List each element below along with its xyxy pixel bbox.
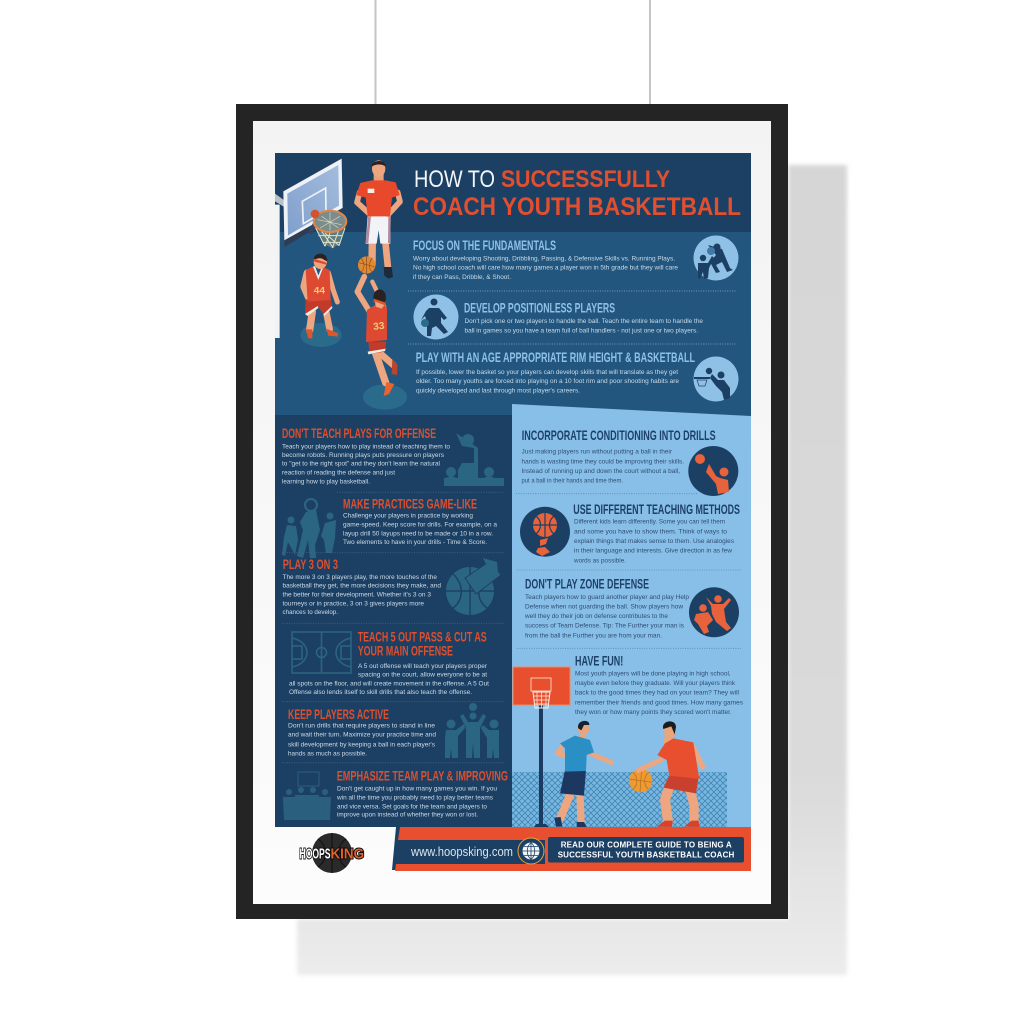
illustration: hoop and backboard (275, 159, 346, 338)
divider (408, 290, 736, 292)
body text: spacing on the court, allow everyone to be at (358, 672, 487, 679)
body text: remember their friends and good times. How many games (575, 699, 743, 706)
illustration: player 44 (300, 254, 342, 347)
icon: basketball and clipboard (446, 558, 501, 615)
divider (337, 491, 505, 493)
body text: game-speed. Keep score for drills. For example, on a (343, 522, 498, 529)
body text: older. Too many youths are forced into playing on a 10 foot rim and poor shooting habits are (416, 378, 680, 385)
section: keep players active (288, 703, 499, 758)
heading: DEVELOP POSITIONLESS PLAYERS (464, 300, 615, 316)
body text (343, 513, 498, 546)
body text: success of Team Defense. Tip: The Further your man is (525, 623, 684, 630)
body text: and vice versa. Set goals for the team and players to (337, 803, 488, 810)
section: have fun (575, 653, 743, 716)
section: play 3 on 3 (282, 556, 501, 616)
body text (464, 318, 704, 334)
icon: basketball trail (520, 507, 570, 557)
body text (288, 723, 437, 758)
logo: hoopsking: KING (330, 846, 364, 862)
body text: they won or how many points they scored won't matter. (575, 709, 732, 716)
illustration: player 33 with ball (357, 256, 407, 410)
body text: Instead of running up and down the court without a ball, (522, 468, 680, 475)
section: use different teaching methods (520, 501, 740, 564)
body text: improve upon instead of whether they won or lost. (337, 812, 478, 819)
body text (282, 443, 450, 486)
dark left panel background (275, 415, 512, 827)
call to action button: SUCCESSFUL YOUTH BASKETBALL COACH (558, 850, 735, 859)
divider (282, 762, 505, 764)
body text: quickly developed and last through most player's careers. (416, 388, 580, 394)
heading: USE DIFFERENT TEACHING METHODS (573, 501, 740, 517)
body text (575, 670, 743, 716)
icon: court diagram (292, 632, 351, 673)
body text: basketball they get, the more decisions they make, and (282, 583, 442, 590)
icon: block shot (694, 236, 738, 280)
hanging strips (374, 0, 651, 104)
body text: A 5 out offense will teach your players proper (358, 663, 487, 670)
body text: Don't run drills that require players to stand in line (288, 723, 436, 730)
body text (336, 786, 498, 819)
divider (282, 701, 505, 703)
heading: YOUR MAIN OFFENSE (358, 643, 453, 659)
body text: Just making players run without putting a ball in their (522, 449, 672, 456)
heading: MAKE PRACTICES GAME-LIKE (343, 496, 477, 512)
icon: team under hoop (283, 772, 331, 820)
section: age appropriate rim height (416, 349, 738, 402)
mid blue section background (275, 232, 751, 416)
heading (358, 629, 487, 659)
picture frame (236, 104, 788, 919)
section: develop positionless players (414, 294, 704, 340)
heading: EMPHASIZE TEAM PLAY & IMPROVING (337, 768, 508, 784)
call to action button: READ OUR COMPLETE GUIDE TO BEING A (561, 841, 732, 850)
poster (275, 153, 751, 873)
title: COACH YOUTH BASKETBALL (413, 193, 741, 221)
title: HOW TO (414, 166, 495, 193)
body text: Don't pick one or two players to handle the ball. Teach the entire team to handle the (464, 318, 704, 325)
heading: DON'T PLAY ZONE DEFENSE (525, 576, 649, 592)
body text (289, 663, 489, 696)
body text: layup drill 50 layups need to be made or 10 in a row. (343, 530, 493, 537)
body text: to "get to the right spot" and they don't learn the natural (282, 461, 440, 468)
body text: and some you have to show them. Think of ways to (574, 528, 728, 535)
white mat (253, 121, 771, 904)
body text: words as possible. (573, 557, 626, 564)
body text: learning how to play basketball. (282, 479, 370, 486)
illustration: red hoop (513, 667, 570, 827)
section: teach 5 out (289, 629, 489, 696)
body text (522, 449, 684, 485)
divider (408, 343, 736, 345)
heading: PLAY WITH AN AGE APPROPRIATE RIM HEIGHT & BASKETBALL (416, 349, 695, 365)
divider (517, 647, 741, 649)
icon: player shooting (688, 446, 738, 496)
divider (282, 552, 505, 554)
body text: ball in games so you have a team full of ball handlers - not just one or two players. (464, 328, 698, 334)
body text: skill development by keeping a ball in each player's (288, 742, 435, 749)
wall shadow (297, 165, 847, 975)
logo: hoopsking: HOOPS (300, 846, 330, 862)
heading: DON'T TEACH PLAYS FOR OFFENSE (282, 425, 436, 441)
divider (516, 493, 697, 495)
call to action button (548, 837, 744, 862)
heading: FOCUS ON THE FUNDAMENTALS (413, 237, 556, 253)
icon: globe (518, 838, 544, 864)
body text: well they do their job on defense contributes to the (524, 613, 669, 620)
illustration: coach (356, 160, 400, 279)
body text (524, 594, 690, 639)
body text: and wait their turn. Maximize your practice time and (288, 732, 437, 739)
body text: become robots. Running plays puts pressure on players (282, 452, 444, 459)
illustration: chain link fence (512, 772, 727, 827)
body text: Two elements to have in your drills - Time & Score. (343, 539, 487, 546)
body text: chances to develop. (282, 609, 338, 616)
body text: Defense when not guarding the ball. Show players how (525, 603, 683, 610)
website url: www.hoopsking.com (410, 845, 513, 859)
body text: Teach players how to guard another player and play Help (525, 594, 690, 601)
heading: TEACH 5 OUT PASS & CUT AS (358, 629, 487, 645)
body text: No high school coach will care how many games a player won in 5th grade but they will care (413, 264, 679, 272)
illustration: player 44: 44 (314, 285, 325, 295)
icon: defending players (689, 587, 739, 637)
heading: KEEP PLAYERS ACTIVE (288, 706, 389, 722)
body text: explain things that makes sense to them. Use analogies (574, 538, 734, 545)
icon: dribbling player (414, 294, 458, 340)
section: don't teach plays (282, 425, 504, 486)
body text: in their language and interests. Give direction in as few (574, 548, 732, 555)
body text: hands as much as possible. (288, 751, 367, 758)
section: emphasize team play (283, 768, 508, 820)
body text: if they can Pass, Dribble, & Shoot. (413, 274, 511, 281)
body text: Challenge your players in practice by working (343, 513, 474, 520)
body text: win all the time you probably need to play better teams (336, 795, 493, 802)
section: don't play zone defense (524, 576, 739, 639)
body text (573, 519, 734, 564)
divider (282, 622, 505, 624)
body text: back to the good times they had on your team? They will (575, 690, 739, 697)
footer (300, 827, 751, 873)
body text: Offense also lends itself to skill drills that also teach the offense. (289, 689, 472, 696)
body text (416, 369, 680, 394)
logo: hoopsking (300, 833, 364, 873)
body text: reaction of reading the defense and just (282, 470, 395, 477)
illustration: player 33 with ball: 33 (373, 321, 386, 333)
footer red area (395, 827, 751, 871)
title (413, 166, 741, 221)
body text: Worry about developing Shooting, Dribbling, Passing, & Defensive Skills vs. Running Plays. (413, 256, 675, 262)
title: SUCCESSFULLY (501, 166, 670, 193)
body text: The more 3 on 3 players play, the more touches of the (282, 574, 438, 581)
body text: Most youth players will be done playing in high school, (575, 670, 731, 677)
body text: put a ball in their hands and time them. (522, 478, 623, 485)
section: make practices game-like (282, 496, 498, 558)
icon: three players with arms raised (445, 703, 499, 758)
footer navy slant (392, 827, 545, 870)
heading: HAVE FUN! (575, 653, 623, 669)
body text: from the ball the Further you are from your man. (525, 632, 662, 639)
body text: maybe even before they graduate. Will your players think (575, 680, 736, 687)
icon: coach and seated players (444, 433, 504, 486)
icon: three jumping players (282, 499, 336, 558)
body text: Different kids learn differently. Some you can tell them (574, 519, 725, 526)
body text (413, 256, 679, 281)
body text: Don't get caught up in how many games you win. If you (337, 786, 498, 793)
header band (275, 153, 751, 232)
body text: all spots on the floor, and will create movement in the offense. A 5 Out (289, 680, 489, 687)
section: focus on the fundamentals (413, 236, 738, 281)
body text: the better for their development. Whether it's 3 on 3 (282, 591, 432, 598)
body text (282, 574, 442, 616)
light blue panel background (512, 404, 751, 827)
illustration: player in red with ball (629, 721, 703, 827)
illustration: player in blue (554, 721, 612, 827)
heading: INCORPORATE CONDITIONING INTO DRILLS (522, 427, 716, 443)
body text: If possible, lower the basket so your players can develop skills that will translate as they get (416, 369, 678, 376)
section: incorporate conditioning (522, 427, 738, 496)
heading: PLAY 3 ON 3 (283, 556, 338, 572)
icon: player shooting at rim (694, 356, 738, 402)
body text: tourneys or in practice, 3 on 3 gives players more (282, 600, 424, 607)
body text: hands is wasting time they could be improving their skills. (522, 458, 684, 465)
divider (517, 569, 741, 571)
body text: Teach your players how to play instead of teaching them to (282, 443, 450, 450)
